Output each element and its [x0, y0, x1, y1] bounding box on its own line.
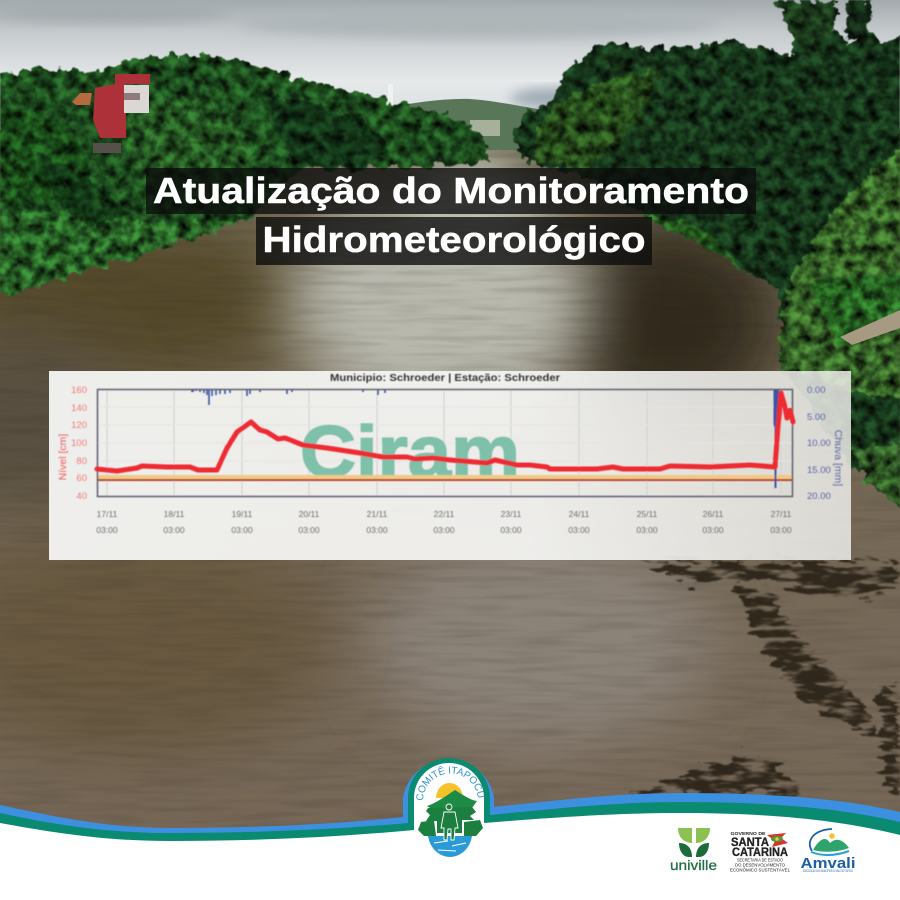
- left axis: level: 160: [71, 385, 87, 396]
- arc text: [423, 773, 478, 801]
- logo: Governo de Santa Catarina: SECRETARIA DE ESTADO: [737, 858, 783, 862]
- sky: [0, 0, 900, 135]
- wooden deck: [840, 310, 900, 345]
- x axis labels: 24/11: [569, 509, 590, 519]
- x axis labels: 03:00: [770, 525, 792, 535]
- footer wave band: [0, 758, 900, 900]
- x axis labels: 03:00: [702, 525, 724, 535]
- right axis: rainfall: 0.00: [807, 385, 826, 396]
- left axis: level: 40: [76, 491, 87, 502]
- logo: Governo de Santa Catarina: CATARINA: [732, 845, 788, 859]
- river water: [0, 130, 900, 850]
- watermark: Ciram: Ciram: [300, 412, 520, 493]
- x axis labels: 21/11: [367, 509, 388, 519]
- right axis: rainfall: [807, 385, 844, 502]
- x axis labels: 03:00: [636, 525, 658, 535]
- x axis labels: 23/11: [501, 509, 522, 519]
- left axis: level: 100: [71, 438, 87, 449]
- river level series: [97, 393, 793, 471]
- x axis labels: 25/11: [637, 509, 658, 519]
- logo: Amvali: [800, 829, 856, 873]
- logo: Univille: [670, 828, 717, 873]
- x axis labels: 03:00: [231, 525, 253, 535]
- right axis: rainfall: 5.00: [807, 412, 826, 423]
- right axis: rainfall: 10.00: [807, 438, 831, 449]
- x axis labels: 27/11: [771, 509, 792, 519]
- title bar: line 2: Hidrometeorológico: [262, 219, 646, 260]
- plot grid: [97, 389, 793, 497]
- panel: river level and rainfall chart: [49, 371, 851, 560]
- x axis labels: 18/11: [164, 509, 185, 519]
- human figure: [441, 804, 458, 840]
- water: [428, 836, 472, 857]
- x axis labels: 03:00: [298, 525, 320, 535]
- tree reflections in water: [630, 562, 900, 795]
- x axis labels: 22/11: [434, 509, 455, 519]
- left axis: level: 80: [76, 456, 87, 467]
- left axis: level: Nível [cm]: [57, 434, 69, 480]
- logo: Comitê Itapocu: COMITÊ ITAPOCU: [416, 766, 485, 800]
- red building: [72, 74, 150, 153]
- left tree mass: [0, 55, 490, 298]
- x axis labels: 03:00: [568, 525, 590, 535]
- title bar: line 1: Atualização do Monitoramento: [153, 170, 749, 211]
- logo: Governo de Santa Catarina: SANTA: [731, 835, 769, 849]
- x axis labels: 20/11: [299, 509, 320, 519]
- x axis labels: 03:00: [163, 525, 185, 535]
- x axis labels: 03:00: [96, 525, 118, 535]
- green hill: [427, 790, 477, 808]
- logo: Univille: univille: [670, 857, 717, 873]
- left axis: level: 120: [71, 420, 87, 431]
- water highlights: [434, 841, 466, 851]
- right tree mass: [515, 0, 900, 520]
- flag emblem: [767, 833, 788, 847]
- sun: [436, 783, 463, 798]
- x axis labels: 17/11: [97, 509, 118, 519]
- right axis: rainfall: 15.00: [807, 465, 831, 476]
- logo: Amvali: ASSOCIAÇÃO DOS MUNICÍPIOS DO VALE DO ITAPOCU: [803, 868, 853, 873]
- x axis labels: [96, 509, 792, 535]
- left axis: level: 60: [76, 473, 87, 484]
- plot frame: [98, 390, 792, 496]
- title: [146, 168, 756, 265]
- left axis: level: [57, 385, 87, 502]
- x axis labels: 03:00: [500, 525, 522, 535]
- threshold bands: [97, 475, 793, 481]
- foliage bands: [418, 807, 483, 836]
- x axis labels: 19/11: [232, 509, 253, 519]
- logo: Governo de Santa Catarina: GOVERNO DE: [730, 831, 766, 836]
- x axis labels: 26/11: [703, 509, 724, 519]
- right axis: rainfall: 20.00: [807, 491, 831, 502]
- logo: Governo de Santa Catarina: DO DESENVOLVIMENTO: [735, 862, 785, 868]
- rainfall series: [192, 389, 778, 488]
- logo: Comitê Itapocu: [416, 766, 485, 857]
- logo: Amvali: Amvali: [800, 855, 856, 872]
- left axis: level: 140: [71, 403, 87, 414]
- logo: Governo de Santa Catarina: ECONÔMICO SUSTENTÁVEL: [730, 866, 790, 872]
- x axis labels: 03:00: [366, 525, 388, 535]
- right axis: rainfall: Chuva [mm]: [832, 430, 844, 486]
- chart heading: Municipio: Schroeder | Estação: Schroeder: [330, 372, 560, 384]
- logo: Governo de Santa Catarina: [730, 831, 790, 872]
- x axis labels: 03:00: [433, 525, 455, 535]
- distant hill and tower: [365, 84, 560, 150]
